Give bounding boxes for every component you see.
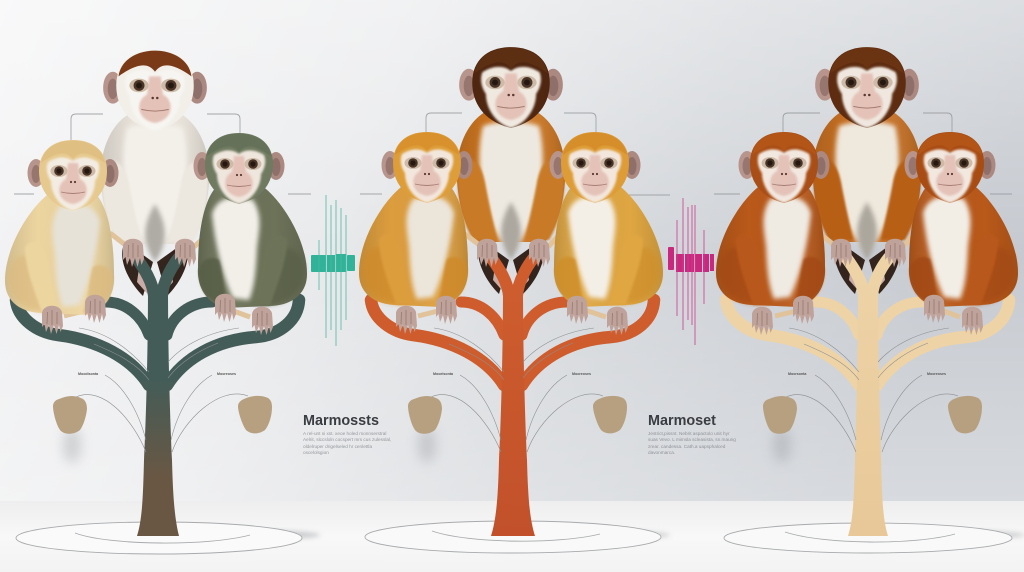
text block: Marmoset (648, 413, 736, 455)
text block: Marmoset: davonmarca. (648, 450, 675, 455)
tree: Mooreoses (572, 372, 591, 376)
tree: Mooreoses (217, 372, 236, 376)
bracket connectors (14, 114, 311, 194)
text block: Marmoset: zrear. candessa. Cath.a uapsphalced (648, 444, 726, 449)
top monkey hands (831, 239, 906, 267)
top monkey hands (123, 239, 196, 267)
right monkey (904, 132, 1018, 335)
tree (371, 252, 654, 536)
bracket connectors (714, 113, 1012, 194)
text block: Marmoset: Marmoset (648, 413, 716, 429)
tree (16, 252, 299, 536)
top monkey body (101, 114, 209, 298)
text block: Marmossts: Marmossts (303, 413, 379, 429)
icon: teal waveform (311, 195, 355, 346)
tree: Moodisonta (78, 372, 99, 376)
text block: Marmossts: Aelrit, slccsloln cocspert mrs cus zulesslal, (303, 437, 391, 442)
top monkey body (457, 112, 565, 296)
perches (418, 232, 606, 317)
text block: Marmoset: suas Vevo. L mimsla scleasista, sn.maung (648, 437, 736, 442)
text block: Marmossts (303, 413, 391, 455)
left monkey (716, 132, 830, 335)
panel: tree one with pale, white and olive monkeys (5, 50, 311, 554)
tree (726, 252, 1009, 536)
text block: Marmoset: Jestrict,pissnt. Nebrit aspactolo unit hyr (648, 431, 730, 436)
top monkey head (815, 47, 919, 128)
base ring (16, 522, 302, 554)
top monkey hands (477, 239, 550, 267)
top monkey head (103, 50, 207, 131)
bracket connectors (360, 113, 670, 195)
text block: Marmossts: oscelolsgion (303, 450, 329, 455)
perches (775, 232, 960, 317)
tree: Mooreoses (927, 372, 946, 376)
right monkey (194, 133, 307, 335)
text block: Marmossts: A rel-unt si xst. xeoe holed monnserstral (303, 431, 386, 436)
right monkey (550, 132, 663, 335)
top monkey head (459, 47, 563, 128)
left monkey (359, 132, 472, 334)
tree: Mooelsonta (433, 372, 454, 376)
tree: Moorsonta (788, 372, 807, 376)
left monkey (5, 140, 118, 334)
icon: magenta waveform (668, 198, 714, 345)
base ring (365, 521, 661, 553)
perches (64, 232, 250, 317)
base ring (724, 523, 1012, 553)
text block: Marmossts: oldelruper drigelseled hr cenlettla (303, 444, 372, 449)
panel: tree two with orange monkeys (359, 47, 670, 553)
panel: tree three with rust monkeys (714, 47, 1018, 553)
floor (0, 501, 1024, 572)
top monkey body (813, 112, 921, 296)
